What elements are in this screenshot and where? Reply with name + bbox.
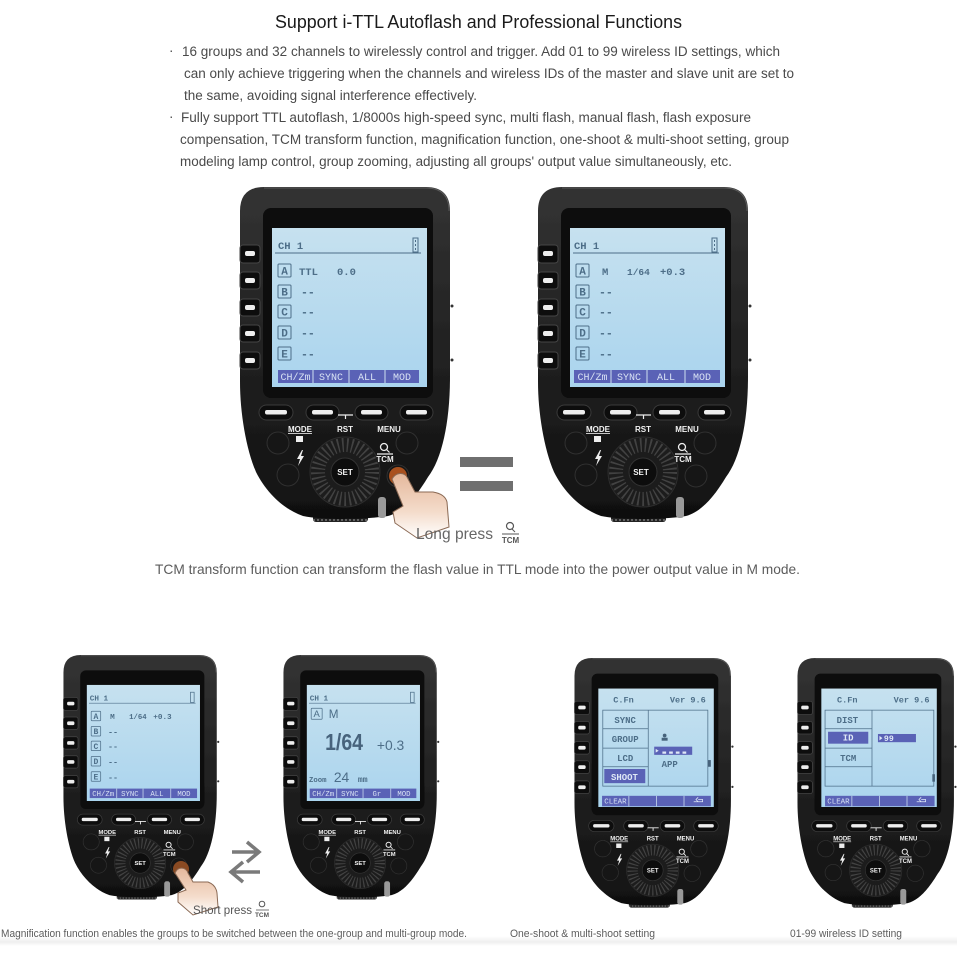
lcd header — [275, 238, 421, 253]
button labels: SET — [337, 468, 353, 477]
button labels: RST — [134, 830, 146, 836]
caption: wireless ID: 01-99 wireless ID setting — [790, 928, 902, 940]
lcd group rows: 1/64 — [627, 267, 650, 278]
button labels: RST — [635, 425, 651, 434]
lcd group rows: M — [110, 714, 115, 722]
lcd header — [573, 238, 719, 253]
lcd group rows: -- — [599, 307, 613, 320]
lcd header: CH 1 — [278, 241, 303, 253]
soft keys: MOD — [397, 791, 411, 799]
lcd group rows: C — [94, 743, 99, 752]
button labels: TCM — [376, 455, 394, 464]
button labels: TCM — [163, 852, 176, 858]
lcd group rows: E — [281, 350, 288, 362]
lcd menu table: GROUP — [612, 735, 639, 745]
lcd group rows: 1/64 — [129, 714, 147, 722]
lcd ID value — [878, 734, 935, 782]
button labels: RST — [870, 837, 882, 843]
device: shoot setting — [574, 658, 734, 908]
device: multi-group view — [63, 655, 219, 900]
lcd group rows: M — [602, 267, 608, 279]
lcd group rows: -- — [301, 349, 315, 362]
button labels: RST — [647, 837, 659, 843]
button labels: RST — [354, 830, 366, 836]
bullet 2: Fully support TTL autoflash, 1/8000s high-speed sync, multi flash, manual flash, flash exposure — [181, 110, 751, 125]
button labels: SET — [870, 869, 882, 875]
button labels: MODE — [99, 830, 116, 836]
lcd group rows: A — [94, 713, 99, 722]
soft keys — [825, 796, 935, 807]
lcd header — [837, 696, 930, 706]
lcd group rows: B — [94, 728, 99, 737]
button labels: TCM — [676, 859, 689, 865]
soft keys: ALL — [657, 373, 675, 384]
lcd menu table: LCD — [617, 754, 634, 764]
lcd menu table: DIST — [837, 716, 859, 726]
lcd header — [89, 692, 196, 703]
soft keys: MOD — [393, 373, 411, 384]
lcd large power readout: A — [314, 709, 321, 720]
lcd group rows: -- — [301, 287, 315, 300]
lcd menu table — [603, 710, 708, 786]
button labels: TCM — [383, 852, 396, 858]
button labels: MENU — [900, 837, 917, 843]
lcd group rows: D — [579, 328, 586, 340]
lcd menu table: TCM — [840, 754, 856, 764]
lcd menu table: SYNC — [614, 716, 637, 726]
label: short press — [193, 901, 269, 919]
soft keys: CLEAR — [604, 799, 627, 807]
lcd group rows: D — [281, 328, 288, 340]
button labels: RST — [337, 425, 353, 434]
lcd menu table: ID — [843, 734, 854, 744]
soft keys: CH/Zm — [280, 372, 311, 384]
button labels: SET — [134, 861, 146, 867]
lcd group rows: +0.3 — [660, 267, 685, 279]
lcd group rows: D — [94, 758, 99, 767]
lcd group rows: B — [579, 288, 586, 300]
lcd header: Ver 9.6 — [670, 696, 706, 706]
lcd header — [309, 692, 416, 703]
button labels: MODE — [610, 837, 628, 843]
button labels: SET — [354, 861, 366, 867]
button labels: MENU — [677, 837, 694, 843]
lcd header: CH 1 — [310, 695, 329, 703]
bullet 1: can only achieve triggering when the channels and wireless IDs of the master and slave unit are set to — [184, 66, 794, 81]
button labels: MODE — [288, 425, 313, 434]
button labels: TCM — [899, 859, 912, 865]
lcd group rows: C — [281, 308, 288, 320]
bullet 2 — [169, 109, 789, 169]
lcd large power readout: M — [329, 708, 338, 721]
button labels: MODE — [833, 837, 851, 843]
lcd group rows: +0.3 — [153, 714, 172, 722]
lcd group rows: -- — [301, 328, 315, 341]
button labels: TCM — [674, 455, 692, 464]
caption: one-shoot: One-shoot & multi-shoot setting — [510, 928, 655, 940]
lcd large power readout — [309, 708, 405, 785]
icon: hand long press — [389, 467, 449, 538]
label: long press: TCM — [502, 536, 520, 545]
bullet 1: 16 groups and 32 channels to wirelessly control and trigger. Add 01 to 99 wireless ID settings, which — [182, 44, 780, 59]
lcd group rows: E — [94, 773, 99, 782]
bullet 2: · — [169, 109, 174, 124]
label: long press — [416, 522, 520, 545]
lcd group rows: -- — [599, 287, 613, 300]
lcd group rows: -- — [108, 773, 118, 783]
button labels: MODE — [586, 425, 611, 434]
button labels — [610, 837, 694, 875]
soft keys — [602, 796, 711, 807]
soft keys: SYNC — [121, 791, 139, 799]
soft keys — [278, 370, 419, 384]
lcd group rows: -- — [108, 728, 118, 738]
lcd group rows: C — [579, 308, 586, 320]
bullet 1: · — [169, 43, 174, 58]
button labels: SET — [647, 869, 659, 875]
soft keys: CH/Zm — [577, 372, 608, 384]
lcd group rows: A — [579, 266, 586, 278]
soft keys — [310, 789, 416, 799]
text block: feature bullets — [169, 43, 794, 169]
lcd header: C.Fn — [613, 696, 634, 706]
button labels — [586, 425, 699, 477]
soft keys — [90, 789, 197, 799]
lcd header: CH 1 — [90, 695, 109, 703]
button labels: MENU — [384, 830, 401, 836]
lcd large power readout: mm — [358, 776, 368, 785]
lcd large power readout: +0.3 — [377, 737, 405, 753]
lcd ID value: 99 — [884, 735, 894, 744]
lcd shoot options — [654, 734, 711, 770]
lcd group rows: E — [579, 350, 586, 362]
button labels: MODE — [319, 830, 336, 836]
lcd group rows — [91, 711, 172, 783]
lcd large power readout: 24 — [334, 769, 350, 785]
button labels: SET — [633, 468, 649, 477]
bullet 2: compensation, TCM transform function, magnification function, one-shoot & multi-shoot setting, group — [180, 132, 789, 147]
lcd header — [613, 696, 706, 706]
soft keys: MOD — [177, 791, 191, 799]
icon: switch arrows — [231, 842, 260, 882]
bullet 2: modeling lamp control, group zooming, adjusting all groups' output value simultaneously, etc. — [180, 154, 732, 169]
soft keys: CH/Zm — [92, 791, 114, 799]
title: Support i-TTL Autoflash and Professional Functions — [275, 12, 682, 32]
device: wireless ID setting — [797, 658, 957, 908]
lcd group rows: -- — [599, 328, 613, 341]
lcd header: CH 1 — [574, 241, 599, 253]
lcd large power readout: Zoom — [309, 777, 327, 785]
soft keys: SYNC — [341, 791, 359, 799]
button labels — [319, 830, 401, 867]
soft keys: CLEAR — [827, 799, 850, 807]
lcd group rows: -- — [108, 758, 118, 768]
caption: TCM transform: TCM transform function can transform the flash value in TTL mode into the power output value in M mode. — [155, 561, 800, 577]
button labels — [288, 425, 401, 477]
label: short press: Short press — [193, 903, 252, 917]
soft keys — [574, 370, 720, 384]
soft keys: ALL — [358, 373, 376, 384]
bullet 1 — [169, 43, 794, 103]
lcd group rows: TTL — [299, 267, 318, 279]
device: TTL mode trigger — [240, 187, 454, 522]
soft keys: MOD — [693, 373, 711, 384]
lcd group rows: -- — [301, 307, 315, 320]
button labels: MENU — [164, 830, 181, 836]
lcd group rows — [278, 264, 356, 362]
bullet 1: the same, avoiding signal interference effectively. — [184, 88, 477, 103]
lcd group rows — [576, 264, 685, 362]
label: short press: TCM — [255, 912, 269, 919]
lcd menu table — [825, 710, 934, 786]
button labels: MENU — [377, 425, 401, 434]
soft keys: SYNC — [319, 373, 343, 384]
lcd group rows: -- — [108, 742, 118, 752]
lcd group rows: 0.0 — [337, 267, 356, 279]
soft keys: Gr — [373, 791, 381, 799]
device: one-group view — [283, 655, 439, 900]
caption: magnification: Magnification function enables the groups to be switched between the one-group and multi-group mode. — [1, 928, 467, 940]
lcd group rows: -- — [599, 349, 613, 362]
lcd header: Ver 9.6 — [894, 696, 930, 706]
lcd group rows: A — [281, 266, 288, 278]
lcd header: C.Fn — [837, 696, 858, 706]
lcd group rows: B — [281, 288, 288, 300]
equals sign — [460, 457, 513, 491]
soft keys: CH/Zm — [312, 791, 334, 799]
soft keys: SYNC — [617, 373, 641, 384]
device: M mode trigger — [538, 187, 752, 522]
button labels: MENU — [675, 425, 699, 434]
icon: hand short press — [173, 861, 218, 915]
soft keys: ALL — [150, 791, 163, 799]
label: long press: Long press — [416, 526, 493, 543]
lcd large power readout: 1/64 — [325, 729, 363, 755]
button labels — [99, 830, 181, 867]
button labels — [833, 837, 917, 875]
lcd shoot options: APP — [662, 760, 678, 770]
lcd menu table: SHOOT — [611, 773, 638, 783]
